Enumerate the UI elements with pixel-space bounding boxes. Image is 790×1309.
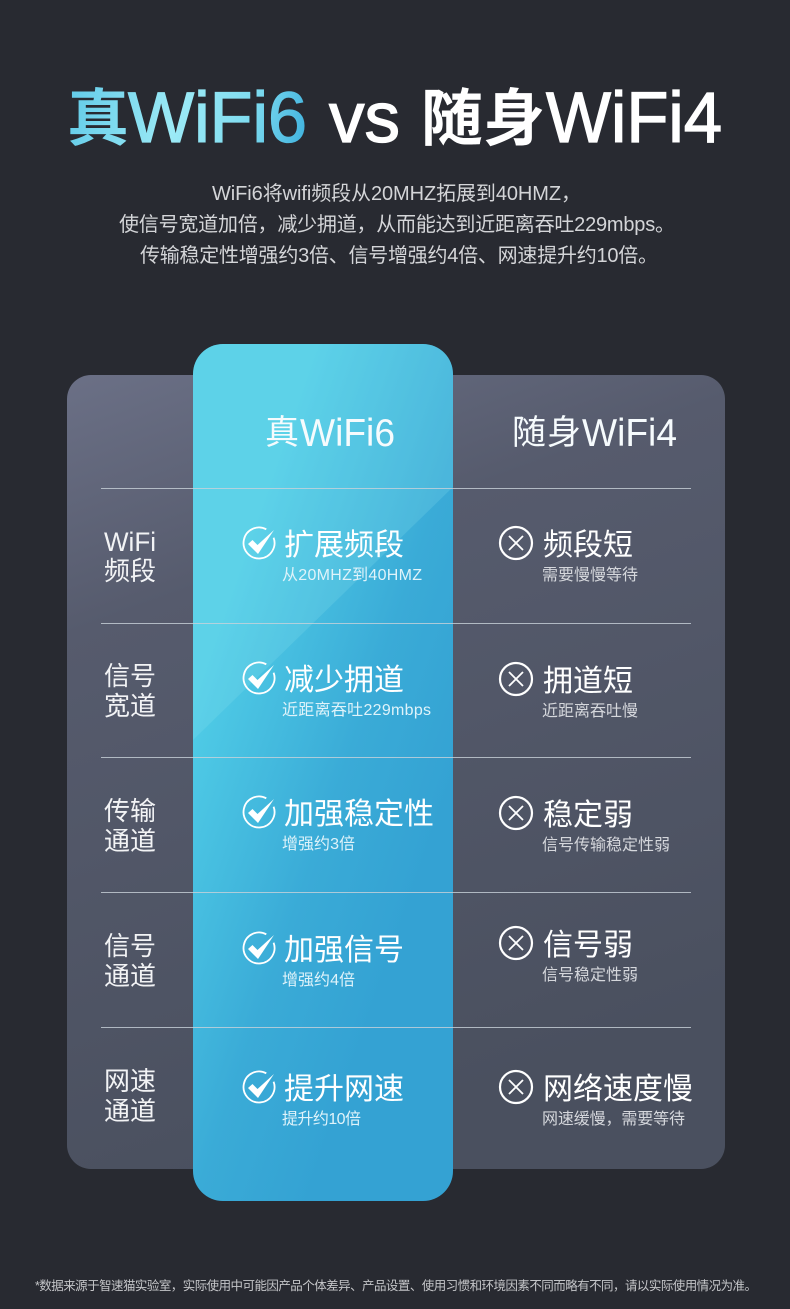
WiFi4 text: 频段短 xyxy=(543,529,633,562)
WiFi4 text: 信号传输稳定性弱 xyxy=(542,836,670,854)
icon: cross xyxy=(500,797,532,829)
row label xyxy=(104,661,156,721)
WiFi6 text: 提升约10倍 xyxy=(282,1110,361,1128)
WiFi6 text: 减少拥道 xyxy=(284,664,404,697)
intro text xyxy=(119,182,675,267)
heading: WiFi6 column: WiFi6 xyxy=(300,412,395,455)
row label: 信号 xyxy=(104,931,156,961)
intro text: WiFi6将wifi频段从20MHZ拓展到40HMZ， xyxy=(212,182,581,205)
row label: 信号 xyxy=(104,661,156,691)
row 1: WiFi band xyxy=(104,527,638,586)
icon: cross xyxy=(500,663,532,695)
row label xyxy=(104,931,156,991)
WiFi4 text: 稳定弱 xyxy=(543,799,633,832)
WiFi6 text: 扩展频段 xyxy=(284,529,404,562)
icon: check xyxy=(244,527,275,558)
row label: 网速 xyxy=(104,1066,156,1096)
row label: 宽道 xyxy=(104,691,156,721)
WiFi6 text: 提升网速 xyxy=(284,1073,404,1106)
row label: 通道 xyxy=(104,1096,156,1126)
row label: 通道 xyxy=(104,826,156,856)
icon: check xyxy=(244,932,275,963)
icon: cross xyxy=(500,1071,532,1103)
WiFi4 text: 需要慢慢等待 xyxy=(542,566,638,584)
icon: cross xyxy=(500,527,532,559)
WiFi4 text: 近距离吞吐慢 xyxy=(542,702,638,720)
title: WiFi6 xyxy=(128,79,307,158)
title: 随身 xyxy=(421,85,545,154)
WiFi6 text: 近距离吞吐229mbps xyxy=(282,701,431,719)
WiFi6 text xyxy=(282,798,434,853)
title: WiFi4 xyxy=(546,79,722,158)
WiFi6 text: 从20MHZ到40HMZ xyxy=(282,566,422,584)
icon: check xyxy=(244,662,275,693)
WiFi6 text xyxy=(282,1073,404,1128)
WiFi4 text xyxy=(542,799,670,854)
heading: WiFi4 column: 随身 xyxy=(512,414,581,452)
WiFi4 text: 信号弱 xyxy=(543,929,633,962)
footnote: *数据来源于智速猫实验室，实际使用中可能因产品个体差异、产品设置、使用习惯和环境因素不同而略有不同，请以实际使用情况为准。 xyxy=(35,1278,757,1293)
row label: WiFi xyxy=(104,527,156,557)
row label: 传输 xyxy=(104,796,156,826)
row 2: signal bandwidth xyxy=(104,661,638,721)
heading: WiFi4 column xyxy=(512,412,677,455)
row 5: network speed xyxy=(104,1066,693,1128)
title xyxy=(67,79,722,158)
WiFi4 text xyxy=(542,1073,693,1128)
heading: WiFi6 column: 真 xyxy=(265,414,299,452)
WiFi6 text xyxy=(282,529,422,584)
WiFi6 text xyxy=(282,664,431,719)
WiFi4 text: 网速缓慢，需要等待 xyxy=(542,1110,685,1128)
intro text: 使信号宽道加倍，减少拥道，从而能达到近距离吞吐229mbps。 xyxy=(119,213,675,236)
icon: check xyxy=(244,796,275,827)
WiFi4 text xyxy=(542,929,638,984)
WiFi6 text: 增强约3倍 xyxy=(282,835,355,853)
row label xyxy=(104,1066,156,1126)
panel: WiFi6 highlight column xyxy=(193,344,453,1201)
panel: comparison card xyxy=(67,375,725,1169)
title: vs xyxy=(329,79,400,158)
WiFi4 text: 拥道短 xyxy=(543,665,633,698)
row 3: transmission channel xyxy=(104,796,670,856)
WiFi4 text xyxy=(542,665,638,720)
row label: 通道 xyxy=(104,961,156,991)
WiFi6 text xyxy=(282,934,404,989)
icon: cross xyxy=(500,927,532,959)
WiFi6 text: 加强信号 xyxy=(284,934,404,967)
WiFi6 text: 加强稳定性 xyxy=(284,798,434,831)
icon: check xyxy=(244,1071,275,1102)
WiFi6 text: 增强约4倍 xyxy=(282,971,355,989)
WiFi4 text xyxy=(542,529,638,584)
row dividers xyxy=(101,488,691,1028)
WiFi4 text: 信号稳定性弱 xyxy=(542,966,638,984)
row label xyxy=(104,796,156,856)
row 4: signal channel xyxy=(104,927,638,991)
title: 真 xyxy=(67,85,129,154)
heading: WiFi4 column: WiFi4 xyxy=(582,412,677,455)
row label xyxy=(104,527,156,586)
intro text: 传输稳定性增强约3倍、信号增强约4倍、网速提升约10倍。 xyxy=(140,244,658,267)
WiFi4 text: 网络速度慢 xyxy=(543,1073,693,1106)
row label: 频段 xyxy=(104,556,156,586)
